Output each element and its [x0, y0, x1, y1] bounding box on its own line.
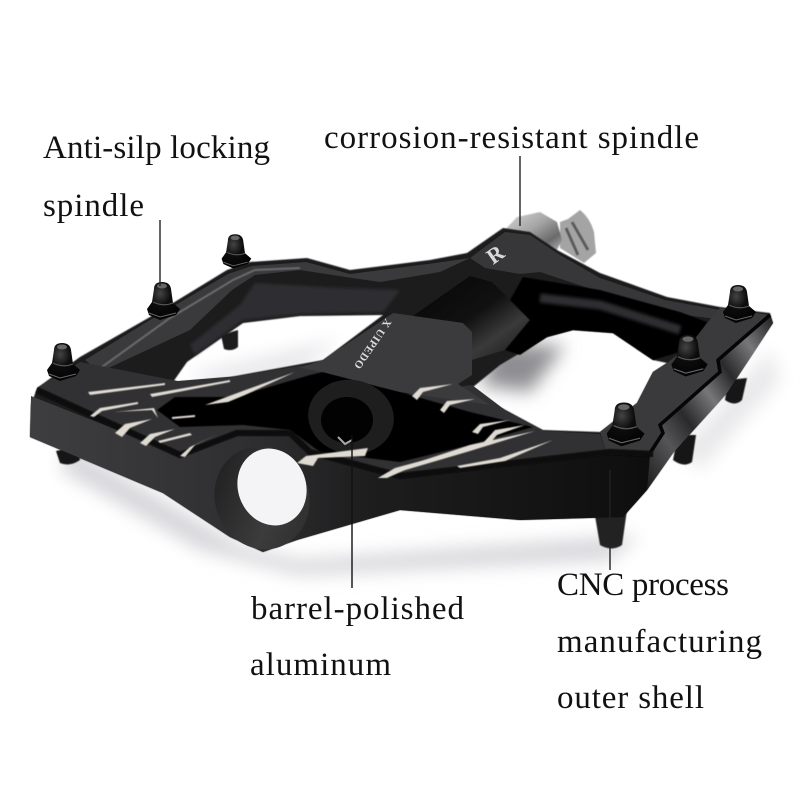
- pedal ring: [200, 433, 324, 563]
- label: anti-slip locking spindle: [43, 130, 270, 224]
- right ridge line: [650, 315, 770, 453]
- left rail inner wall: [190, 283, 400, 355]
- label: barrel-polished aluminum: aluminum: [250, 647, 391, 683]
- front glossy edge: [37, 390, 653, 476]
- stud right 1: [723, 285, 756, 323]
- axle nut: [302, 373, 400, 461]
- leader line: anti-slip: [159, 220, 161, 286]
- label: anti-slip locking spindle: Anti-silp locking: [43, 130, 270, 166]
- front top face: [37, 362, 607, 477]
- silver streaks: [88, 372, 553, 478]
- right arm glossy band: [505, 277, 707, 360]
- pedal body: [30, 228, 773, 552]
- spindle thread shading: [566, 222, 588, 255]
- label: CNC process manufacturing outer shell: manufacturing: [557, 624, 762, 660]
- spindle: [503, 210, 596, 263]
- stud mid left: [147, 282, 180, 320]
- stud right 3: [607, 403, 645, 446]
- label: CNC process manufacturing outer shell: CNC process: [557, 567, 729, 603]
- nut socket: [321, 397, 373, 443]
- leader line: CNC: [609, 470, 611, 570]
- spindle thread: [560, 210, 596, 263]
- label: CNC process manufacturing outer shell: [557, 567, 762, 716]
- stud front left: [47, 343, 80, 381]
- left rail highlight: [95, 268, 300, 372]
- right arm top surface: [470, 232, 725, 320]
- leader line: barrel-polished: [351, 435, 353, 588]
- label: barrel-polished aluminum: [250, 591, 464, 683]
- label: anti-slip locking spindle: spindle: [43, 188, 144, 224]
- black inset: [157, 372, 533, 462]
- nut highlight: [338, 437, 352, 444]
- label: CNC process manufacturing outer shell: outer shell: [557, 680, 704, 716]
- front side face: [30, 396, 650, 552]
- logo text on platform: X UIPEDO: [351, 316, 393, 371]
- logo on right arm: R: [482, 239, 510, 269]
- right arm inner highlight: [540, 298, 680, 330]
- axle tube: [410, 276, 530, 360]
- ring outer: [200, 433, 324, 563]
- nut outer: [302, 373, 400, 461]
- label: barrel-polished aluminum: barrel-polished: [251, 591, 464, 627]
- stud back left: [222, 234, 251, 268]
- ground shadow: [60, 340, 780, 575]
- label: corrosion-resistant spindle: corrosion-resistant spindle: [324, 120, 699, 156]
- ring hole: [227, 439, 317, 535]
- stud right 2: [671, 335, 708, 376]
- right side face: [647, 315, 773, 490]
- studs: [47, 234, 756, 446]
- center platform: [300, 313, 490, 405]
- left rail top surface: [85, 258, 470, 372]
- underside pins: [56, 330, 747, 548]
- leader line: corrosion-resistant: [519, 156, 521, 226]
- spindle housing: [503, 212, 562, 252]
- right rail top surface: [600, 308, 770, 453]
